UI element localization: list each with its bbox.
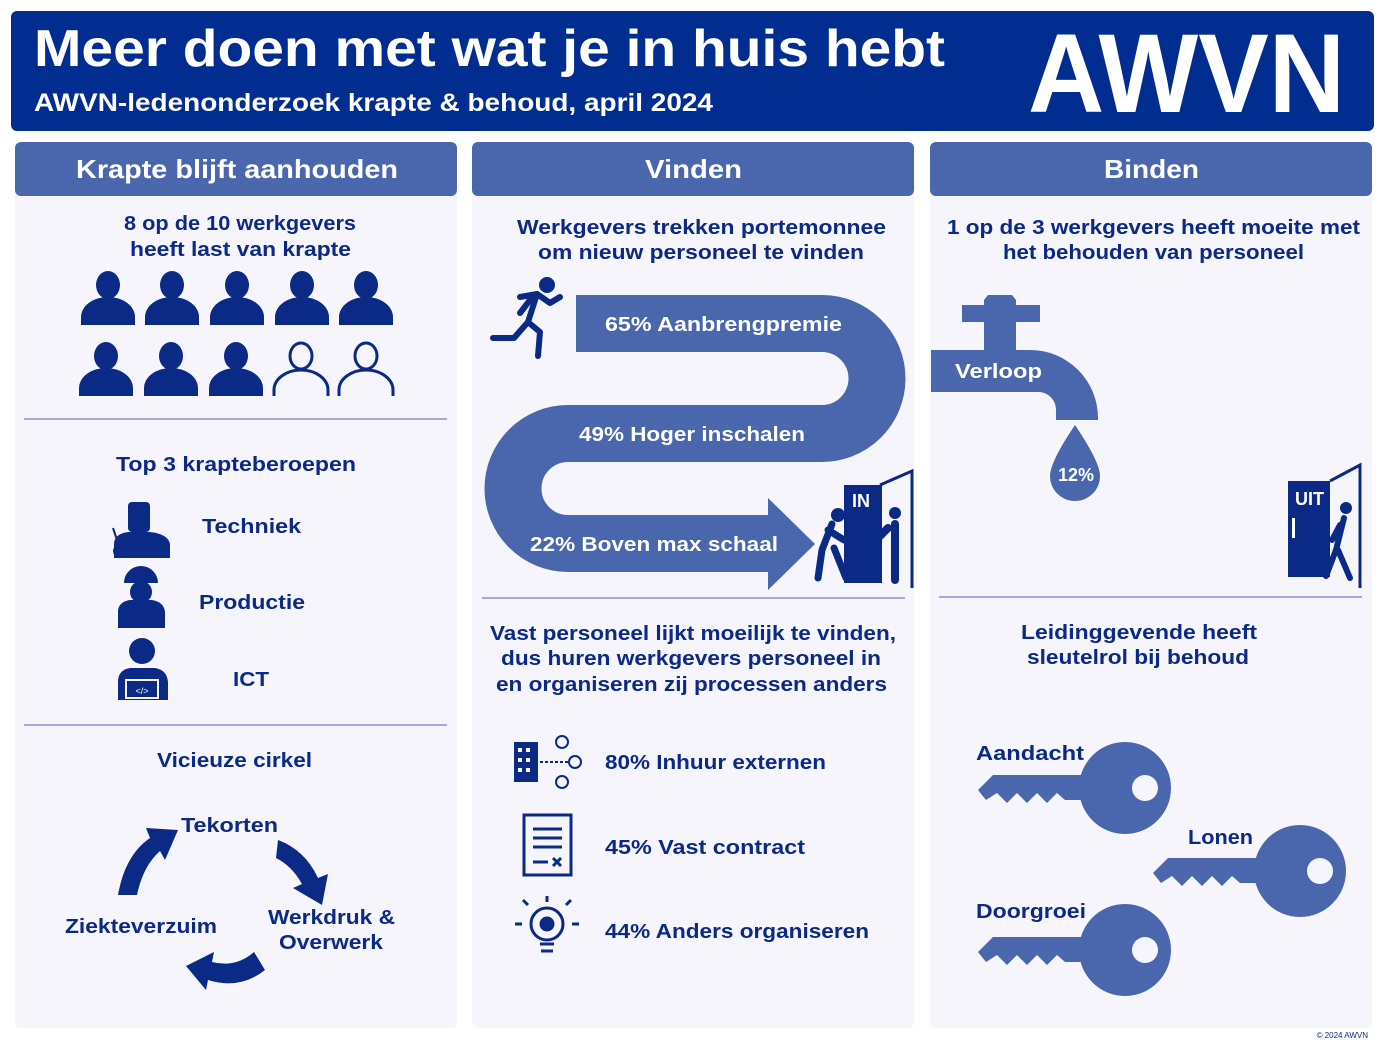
icon: technicus xyxy=(113,502,170,558)
key: doorgroei: Doorgroei xyxy=(976,901,1086,923)
text: portemonnee xyxy=(517,217,886,264)
panel: vinden xyxy=(472,142,914,1028)
text: 8 op 10 xyxy=(124,213,356,261)
cycle diagram: Werkdruk & xyxy=(268,907,395,929)
footer copyright: © 2024 AWVN xyxy=(1317,1031,1368,1040)
icon: drop 12%: 12% xyxy=(1058,465,1094,485)
snake path chart: 22% Boven max schaal xyxy=(530,534,778,556)
icon: lightbulb xyxy=(515,896,579,951)
cycle diagram: Tekorten xyxy=(181,815,278,837)
logo: AWVN xyxy=(1028,11,1345,136)
icon: door IN xyxy=(818,471,912,588)
heading: vicieuze cirkel: Vicieuze cirkel xyxy=(157,750,312,772)
panel: vinden: 44% Anders organiseren xyxy=(605,921,869,943)
icon: door UIT: UIT xyxy=(1295,489,1324,509)
text: 1 op 3: het behouden van personeel xyxy=(1003,242,1304,264)
icon: runner xyxy=(493,277,560,356)
text: portemonnee: Werkgevers trekken portemonnee xyxy=(517,217,886,239)
icon: inhuur xyxy=(514,736,581,788)
text: 1 op 3 xyxy=(947,217,1360,264)
snake path chart: 65% Aanbrengpremie xyxy=(605,314,842,336)
heading: vinden xyxy=(472,142,914,196)
cycle diagram: Ziekteverzuim xyxy=(65,916,217,938)
text: vast personeel: dus huren werkgevers personeel in xyxy=(501,648,881,670)
text: vast personeel: en organiseren zij processen anders xyxy=(496,674,887,696)
panel: krapte: Krapte blijft aanhouden xyxy=(76,154,398,184)
key: aandacht xyxy=(976,742,1171,834)
cycle diagram xyxy=(65,815,395,990)
header banner xyxy=(11,11,1374,136)
snake path chart: 49% Hoger inschalen xyxy=(579,424,805,446)
text: vast personeel: Vast personeel lijkt moeilijk te vinden, xyxy=(490,623,896,645)
panel: binden xyxy=(930,142,1372,1028)
key: lonen xyxy=(1153,825,1346,917)
key: doorgroei xyxy=(976,901,1171,996)
icon grid: people xyxy=(79,271,393,396)
title: Meer doen met wat je in huis hebt xyxy=(34,20,945,78)
icon: drop 12% xyxy=(1050,425,1100,501)
icon: door UIT xyxy=(1288,465,1360,588)
panel: krapte: ICT xyxy=(233,669,269,691)
icon: productie xyxy=(118,566,165,628)
text: 1 op 3: 1 op de 3 werkgevers heeft moeite met xyxy=(947,217,1360,239)
panel: vinden: 80% Inhuur externen xyxy=(605,752,826,774)
panel: binden: Binden xyxy=(1104,154,1199,184)
icon: ICT: </> xyxy=(135,686,149,696)
snake path chart xyxy=(513,314,877,590)
text: 8 op 10: 8 op de 10 werkgevers xyxy=(124,213,356,235)
heading: binden xyxy=(930,142,1372,196)
text: leidinggevende xyxy=(1021,622,1257,669)
key: lonen: Lonen xyxy=(1188,827,1253,849)
heading: top 3: Top 3 krapteberoepen xyxy=(116,454,356,476)
panel: krapte xyxy=(15,142,457,1028)
icon: tap xyxy=(931,295,1098,420)
icon: ICT xyxy=(118,638,168,700)
panel: krapte: Techniek xyxy=(202,516,302,538)
heading: krapte xyxy=(15,142,457,196)
panel: vinden: Vinden xyxy=(645,154,742,184)
subtitle: AWVN-ledenonderzoek krapte & behoud, april 2024 xyxy=(34,89,713,117)
key: aandacht: Aandacht xyxy=(976,743,1084,765)
icon: contract xyxy=(524,815,571,875)
text: vast personeel xyxy=(490,623,896,696)
cycle diagram: Overwerk xyxy=(279,932,384,954)
text: leidinggevende: sleutelrol bij behoud xyxy=(1027,647,1249,669)
text: portemonnee: om nieuw personeel te vinden xyxy=(538,242,864,264)
panel: krapte: Productie xyxy=(199,592,305,614)
text: 8 op 10: heeft last van krapte xyxy=(130,239,351,261)
panel: vinden: 45% Vast contract xyxy=(605,837,805,859)
icon: door IN: IN xyxy=(852,491,870,511)
icon: tap: Verloop xyxy=(955,361,1042,383)
text: leidinggevende: Leidinggevende heeft xyxy=(1021,622,1257,644)
